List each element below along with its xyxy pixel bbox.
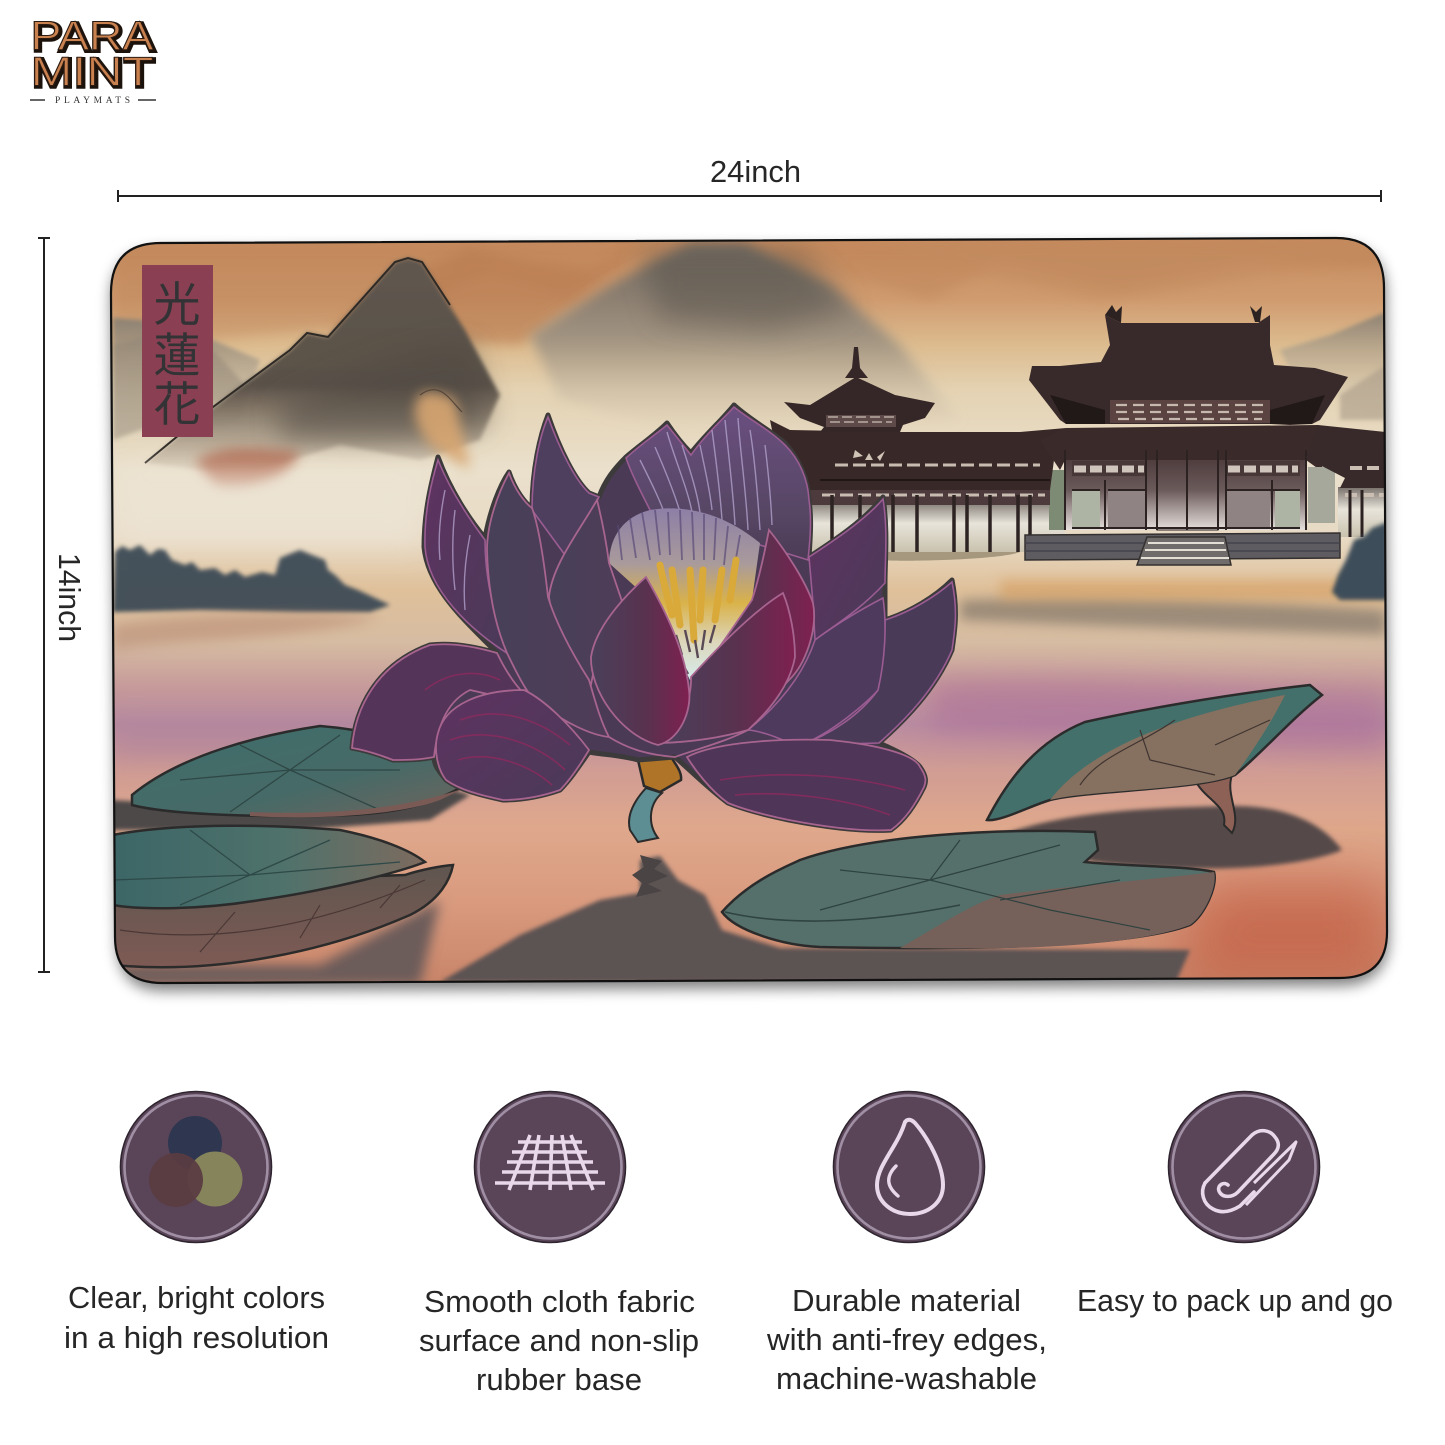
playmat shadow — [111, 245, 1389, 991]
kanji seal — [142, 265, 213, 437]
width label: 24inch — [710, 154, 801, 189]
caption: fabric: rubber base — [476, 1362, 642, 1397]
central misty grey mountain — [528, 242, 941, 411]
mat border — [111, 238, 1387, 983]
height label: 14inch — [52, 553, 87, 642]
flower silhouette — [352, 405, 955, 830]
feature: portability — [1077, 1092, 1393, 1318]
stamen core — [609, 508, 760, 680]
caption: colors: in a high resolution — [64, 1320, 329, 1355]
stem — [629, 788, 662, 842]
feature: colors — [64, 1092, 329, 1355]
icon: colour circles — [120, 1092, 272, 1242]
petal veins — [425, 673, 905, 815]
logo word: MINT: MINT — [30, 48, 154, 94]
caption: portability: Easy to pack up and go — [1077, 1283, 1393, 1318]
logo word: MINT: MINT — [32, 50, 155, 96]
back petal stripes — [439, 418, 772, 610]
horizon haze bands — [113, 580, 1390, 985]
kanji text — [154, 266, 200, 435]
caption: fabric — [419, 1284, 699, 1397]
dark foreground mountains — [145, 258, 500, 487]
calyx — [638, 757, 681, 792]
lily pad: bottom centre — [722, 831, 1215, 949]
temple: stone platform and steps — [1025, 533, 1340, 565]
width dimension — [118, 154, 1381, 202]
playmat artwork — [100, 230, 1400, 1000]
kanji text: 光 — [154, 266, 200, 335]
lotus flower — [352, 405, 955, 842]
icon: fabric grid — [474, 1092, 626, 1242]
kanji text: 蓮 — [154, 317, 200, 386]
lily pad: upper left — [132, 726, 465, 817]
logo: Paramint Playmats — [30, 12, 156, 106]
water shadows — [110, 780, 1342, 985]
right distant mountains — [1280, 311, 1384, 390]
logo word: PARA: PARA — [30, 12, 154, 58]
lily pad: curled right — [987, 685, 1322, 833]
caption: durability: machine-washable — [776, 1361, 1037, 1396]
kanji text: 花 — [154, 366, 200, 435]
inner petals — [352, 473, 925, 830]
mist band on the left — [113, 470, 430, 545]
temple: main hall — [1029, 305, 1348, 530]
logo subtitle: PLAYMATS — [55, 96, 130, 106]
misty tree island on the left — [113, 545, 390, 650]
caption: colors: Clear, bright colors — [68, 1280, 325, 1315]
caption: fabric: surface and non-slip — [419, 1323, 699, 1358]
caption: fabric: Smooth cloth fabric — [424, 1284, 695, 1319]
tree at right edge — [1332, 522, 1388, 600]
caption: durability: Durable material — [792, 1283, 1021, 1318]
lily pad: lower left — [113, 826, 453, 967]
caption: colors — [64, 1280, 329, 1355]
temple: right wing — [1306, 425, 1386, 537]
height dimension — [38, 238, 87, 972]
icon: water drop — [834, 1092, 984, 1242]
icon: rolled mat — [1168, 1092, 1320, 1242]
feature: durability — [766, 1092, 1047, 1396]
distant left mountains — [112, 316, 261, 406]
back petals — [425, 407, 955, 745]
caption: durability: with anti-frey edges, — [766, 1322, 1047, 1357]
temple: left wing and pagoda — [770, 347, 1066, 561]
logo word: PARA: PARA — [32, 14, 156, 60]
sky and distant orange mountains — [113, 240, 1386, 350]
feature: fabric — [419, 1092, 699, 1397]
caption: durability — [766, 1283, 1047, 1396]
